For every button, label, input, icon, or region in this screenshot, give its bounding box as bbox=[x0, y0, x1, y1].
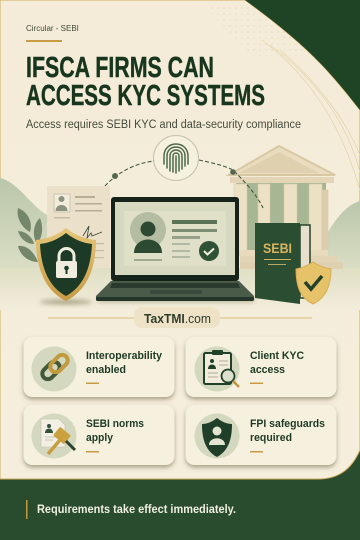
footer note: Requirements take effect immediately. bbox=[37, 502, 236, 516]
card: SEBI norms: SEBI norms bbox=[86, 418, 144, 430]
icon: document and gavel bbox=[32, 414, 76, 458]
card: client KYC bbox=[186, 337, 336, 397]
title bbox=[26, 52, 265, 112]
title: ACCESS KYC SYSTEMS bbox=[26, 80, 265, 112]
gold rule bbox=[26, 40, 62, 42]
card: interoperability: enabled bbox=[86, 364, 126, 376]
top-right dark green corner bbox=[245, 0, 360, 110]
title: IFSCA FIRMS CAN bbox=[26, 52, 214, 84]
brand pill bbox=[48, 307, 312, 328]
card: client KYC: Client KYC bbox=[250, 350, 304, 362]
icon: lock shield bbox=[36, 228, 96, 304]
icon: chain link bbox=[32, 346, 76, 392]
dashed connector bbox=[105, 160, 263, 208]
card: FPI safeguards: FPI safeguards bbox=[250, 418, 325, 430]
brand pill: TaxTMI.com bbox=[144, 312, 211, 326]
icon: SEBI book: SEBI bbox=[263, 240, 292, 256]
category label: Circular - SEBI bbox=[26, 24, 79, 33]
icon: gold check shield bbox=[296, 262, 331, 304]
card: FPI safeguards: required bbox=[250, 432, 292, 444]
icon: SEBI book bbox=[255, 223, 310, 304]
card: interoperability bbox=[24, 337, 174, 397]
card: SEBI norms: apply bbox=[86, 432, 114, 444]
illustration: bank building bbox=[229, 146, 343, 269]
icon: clipboard and magnifier bbox=[194, 346, 240, 392]
illustration: hills and floor bbox=[0, 178, 360, 310]
subtitle: Access requires SEBI KYC and data-security compliance bbox=[26, 119, 301, 131]
icon: person shield bbox=[194, 414, 240, 458]
icon: fingerprint bbox=[154, 136, 198, 180]
illustration: ID document bbox=[47, 186, 110, 268]
card: FPI safeguards bbox=[186, 405, 336, 465]
illustration: leaves bbox=[18, 208, 42, 262]
card: client KYC: access bbox=[250, 364, 285, 376]
card: interoperability: Interoperability bbox=[86, 350, 163, 362]
illustration: laptop bbox=[96, 197, 254, 302]
card: SEBI norms bbox=[24, 405, 174, 465]
